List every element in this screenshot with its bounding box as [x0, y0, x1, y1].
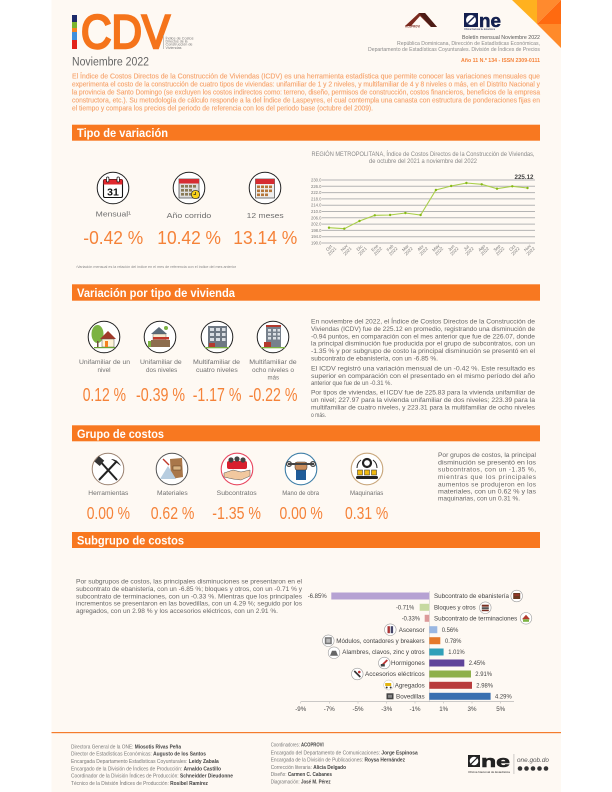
y axis labels: 190.0: [311, 240, 322, 246]
text block: análisis general: [311, 317, 536, 419]
label: Herramientas: Herramientas: [88, 490, 128, 497]
footer credits left: Encargado de la División de Índices de Producción: Arnaldo Castillo: [71, 765, 221, 772]
intro text: experimenta el costo de la construcción de cuatro tipos de viviendas: unifamiliar de 1 y 2 niveles, y multifamiliar de 4 y 8 niveles o más, en el Distrito Nacional y: [72, 80, 540, 88]
y axis labels: 194.0: [311, 234, 322, 239]
publication info: República Dominicana, Dirección de Estadísticas Económicas,: [397, 41, 540, 47]
bar category labels: Subcontrato de terminaciones: [434, 616, 517, 622]
icon: eight-level building: [257, 321, 289, 353]
y axis labels: 218.0: [311, 196, 322, 201]
y axis labels: 198.0: [311, 228, 322, 233]
intro text: la provincia de Santo Domingo (se excluyen los costos indirectos como: terreno, diseño, permisos de construcción, costos financieros, beneficios de la empresa: [72, 88, 540, 96]
social icons: [518, 766, 548, 771]
x axis: -3%: [381, 706, 393, 713]
x axis labels: 2022: [434, 246, 445, 256]
x axis labels: May: [431, 243, 441, 253]
bar category labels: Agregados: [395, 682, 425, 690]
text block: subgrupos: subcontrato de terminaciones, con un -0.33 %. Mientras que los principales: [76, 593, 303, 600]
text block: análisis general: Por tipos de viviendas, el ICDV fue de 225.83 para la vivienda unifamiliar de: [311, 390, 535, 397]
x axis labels: Sep: [492, 243, 502, 252]
footer credits right: Encargada de la División de Publicaciones: Roysa Hernández: [271, 758, 405, 764]
x axis labels: Ago: [477, 243, 487, 252]
last value: 225.12: [514, 174, 534, 181]
icon: two-level house: [144, 321, 176, 353]
text block: análisis general: anterior que fue de un -0.31 %.: [311, 380, 392, 387]
label: Materiales: Materiales: [157, 490, 188, 497]
logo: ONE: [464, 11, 501, 31]
value: unifamiliar dos niveles: -0.39 %: [136, 384, 185, 405]
bar values: 0.56%: [442, 627, 459, 634]
text block: grupos de costos: mientras que los principales: [438, 474, 537, 481]
x axis labels: 2022: [480, 246, 491, 256]
x axis labels: Oct: [508, 243, 517, 252]
icon: labour: [285, 453, 317, 485]
text block: análisis general: multifamiliar de cuatro niveles, y 223.31 para la multifamiliar de ocho niveles: [311, 405, 536, 412]
y axis labels: 206.0: [311, 215, 322, 220]
label: unifamiliar dos niveles: Unifamiliar de: [140, 359, 182, 366]
section heading: Subgrupo de costos: Subgrupo de costos: [77, 534, 184, 548]
bar values: -0.33%: [402, 616, 420, 622]
publication info: Departamento de Estadísticas Coyunturales. División de Índices de Precios: [368, 46, 540, 53]
panel: tipos de vivienda: [79, 321, 297, 405]
label: Mensual: Mensual¹: [96, 210, 132, 218]
value: multifamiliar ocho niveles: -0.22 %: [249, 384, 297, 405]
icon: year calendar with clock: [173, 172, 205, 204]
bar category icons: [322, 590, 532, 699]
text block: grupos de costos: disminución se presentó en los: [438, 459, 537, 466]
label: 12 meses: 12 meses: [247, 211, 284, 220]
bar values: -6.85%: [308, 593, 327, 600]
text block: grupos de costos: subcontratos, con un -1.35 %,: [438, 467, 536, 474]
x axis labels: 2022: [403, 246, 414, 256]
text block: análisis general: un nivel; 227.97 para la vivienda unifamiliar de dos niveles; 223.39 para la: [311, 397, 535, 404]
y axis labels: [311, 178, 322, 246]
logo: ONE: Oficina Nacional de Estadística: [464, 28, 496, 31]
intro text: [72, 71, 540, 112]
date heading: Noviembre 2022: [72, 56, 149, 68]
label: multifamiliar ocho niveles: [249, 359, 297, 382]
panel: tipo de variación: [76, 172, 297, 269]
x axis labels: 2022: [464, 246, 475, 256]
text block: subgrupos: agregados, con un 2.98 % y los accesorios eléctricos, con un 2.91 %.: [76, 608, 278, 615]
footer credits left: Directora General de la ONE: Miosotis Rivas Peña: [71, 744, 181, 750]
text block: grupos de costos: aumentos se produjeron en los: [438, 481, 537, 488]
panel: grupo de costos: [87, 453, 388, 523]
x axis labels: 2022: [373, 246, 384, 256]
text block: grupos de costos: Por grupos de costos, la principal: [438, 452, 537, 459]
section heading: Grupo de costos: [72, 425, 540, 441]
bar values: 4.29%: [495, 694, 512, 700]
label: unifamiliar un nivel: Unifamiliar de un: [79, 359, 131, 366]
x axis: 5%: [496, 706, 506, 713]
section heading: Grupo de costos: Grupo de costos: [77, 427, 164, 441]
label: multifamiliar ocho niveles: ocho niveles o: [252, 367, 295, 374]
bar values: 2.98%: [476, 682, 493, 690]
chart: índice línea: [311, 151, 536, 256]
text block: análisis general: subcontrato de ebanistería, con un -6.85 %.: [311, 355, 438, 362]
corner decoration: [512, 0, 561, 48]
text block: subgrupos: Por subgrupos de costos, las principales disminuciones se presentaron en el: [76, 579, 303, 586]
bar category labels: Subcontrato de ebanistería: [434, 593, 509, 600]
label: multifamiliar cuatro niveles: [193, 359, 241, 374]
section heading: Tipo de variación: Tipo de variación: [77, 126, 168, 140]
bar values: 0.78%: [445, 638, 462, 645]
bar category labels: Ascensor: [399, 627, 425, 634]
x axis labels: Feb: [386, 243, 395, 252]
text block: análisis general: -0.94 puntos, en comparación con el mes anterior que fue de 226.07, donde: [311, 333, 535, 340]
value: multifamiliar cuatro niveles: -1.17 %: [193, 384, 241, 405]
logo: ACOPROVI: ACOPROVI: [405, 24, 420, 28]
text block: análisis general: la principal disminución fue producida por el grupo de subcontratos, con un: [311, 341, 535, 348]
footnote: ¹Variación mensual es la relación del índice en el mes de referencia con el índice del mes anterior: [76, 265, 237, 269]
icon: monthly calendar: [97, 172, 129, 204]
icon: tools: [92, 453, 124, 485]
text block: análisis general: o más.: [311, 412, 326, 419]
logo: ONE: ne: [479, 11, 501, 31]
text block: subgrupos: subcontrato de ebanistería, con un -6.85 %; bloques y otros, con un -0.71 % y: [76, 586, 303, 593]
bar values: [308, 593, 512, 700]
bar category labels: [336, 593, 517, 700]
publication info: Año 11 N.º 134 - ISSN 2309-0111: [461, 58, 540, 64]
text block: análisis general: superior en comparación con el presentado en el mismo período del año: [311, 373, 535, 380]
label: Maquinarias: Maquinarias: [350, 490, 383, 497]
footer credits left: Director de Estadísticas Económicas: Augusto de los Santos: [71, 752, 206, 758]
label: unifamiliar dos niveles: [140, 359, 182, 374]
logo: ICDV: Índice de Costos: [166, 36, 194, 40]
label: multifamiliar cuatro niveles: Multifamiliar de: [193, 359, 241, 366]
x axis: -7%: [324, 706, 335, 713]
footer logo: ONE: [468, 752, 549, 774]
intro text: constructora, etc.). Su metodología de cálculo responde a la del Índice de Laspeyres, el cual contempla una canasta con estructura de ponderaciones fijas en: [72, 95, 540, 104]
footer credits right: [271, 743, 418, 785]
section heading: Subgrupo de costos: [72, 532, 540, 548]
value: Maquinarias: 0.31 %: [345, 503, 388, 523]
icon: one-level house: [88, 321, 120, 353]
text block: análisis general: Viviendas (ICDV) fue de 225.12 en promedio, registrando una disminución de: [311, 326, 535, 333]
x axis labels: Jun: [447, 243, 456, 252]
footer credits right: Corrección literaria: Alicia Delgado: [271, 765, 346, 771]
footer credits left: Encargada Departamento Estadísticas Coyunturales: Leidy Zabala: [71, 759, 219, 765]
x axis: -9%: [295, 706, 307, 713]
label: unifamiliar un nivel: nivel: [98, 367, 110, 374]
bar values: 2.91%: [475, 671, 492, 678]
footer logo: ONE: Oficina Nacional de Estadística: [468, 770, 511, 774]
publication info: [368, 35, 540, 64]
x axis labels: Nov: [340, 243, 349, 252]
text block: grupos de costos: [438, 452, 537, 503]
x axis labels: 2021: [327, 246, 338, 256]
bar values: 2.45%: [469, 660, 486, 667]
x axis labels: 2022: [388, 246, 399, 256]
x axis: -1%: [409, 706, 421, 713]
y axis labels: 210.0: [311, 209, 322, 214]
x axis labels: Ene: [370, 243, 380, 252]
bar category labels: Hormigones: [391, 660, 425, 667]
x axis labels: [324, 242, 536, 256]
bar values: -0.71%: [396, 604, 415, 612]
x axis labels: 2021: [342, 246, 353, 256]
value: 12 meses: 13.14 %: [233, 227, 297, 248]
x axis labels: 2022: [495, 246, 506, 256]
text block: análisis general: -1.35 % y por subgrupo de costo la principal disminución se presentó en el: [311, 348, 536, 355]
section heading: Tipo de variación: [72, 125, 540, 141]
text block: subgrupos: [76, 579, 303, 615]
label: multifamiliar ocho niveles: más: [268, 374, 279, 382]
value: Herramientas: 0.00 %: [87, 503, 130, 523]
y axis labels: 226.0: [311, 184, 322, 189]
x axis labels: Abr: [416, 243, 425, 252]
logo: ICDV: CDV: [81, 5, 171, 58]
line series: [328, 182, 529, 230]
y axis labels: 214.0: [311, 203, 322, 208]
bar category labels: Módulos, contadores y breakers: [336, 638, 425, 645]
footer credits left: Técnico de la División Índices de Producción: Rosibel Ramírez: [71, 780, 208, 787]
value: unifamiliar un nivel: 0.12 %: [83, 384, 126, 405]
x axis labels: Oct: [325, 243, 334, 252]
bar category labels: Bloques y otros: [434, 604, 476, 612]
x axis: [295, 702, 514, 713]
label: Mano de obra: Mano de obra: [282, 490, 319, 497]
y axis labels: 230.0: [311, 178, 322, 182]
x axis: 1%: [439, 706, 449, 713]
value: Materiales: 0.62 %: [151, 503, 194, 523]
icon: subcontracts: [221, 453, 253, 485]
footer credits right: Diagramación: José M. Pérez: [271, 779, 331, 785]
footer credits right: Coordinadores: ACOPROVI: [271, 743, 324, 749]
x axis labels: Mar: [401, 243, 410, 252]
chart title: [312, 151, 535, 165]
intro text: El Índice de Costos Directos de la Construcción de Viviendas (ICDV) es una herramienta estadística que permite conocer las variaciones mensuales que: [72, 71, 540, 80]
x axis labels: Nov: [523, 243, 533, 252]
publication info: Boletín mensual Noviembre 2022: [462, 35, 540, 41]
value: año corrido: 10.42 %: [157, 227, 221, 248]
logo: ICDV: Construcción de: [166, 43, 193, 47]
logo: ACOPROVI: [405, 13, 437, 28]
x axis: 3%: [468, 706, 477, 713]
bar category labels: Bovedillas: [396, 694, 425, 700]
footer credits right: Encargado del Departamento de Comunicaciones: Jorge Espinosa: [271, 750, 418, 756]
x axis labels: Dic: [355, 243, 364, 252]
x axis labels: 2021: [357, 246, 368, 256]
bars: [331, 592, 491, 700]
bar values: 1.01%: [448, 649, 465, 656]
text block: grupos de costos: materiales, con un 0.62 % y las: [438, 488, 537, 495]
text block: análisis general: En noviembre del 2022, el Índice de Costos Directos de la Construcción de: [311, 317, 535, 326]
label: unifamiliar un nivel: [79, 359, 131, 374]
value: Subcontratos: -1.35 %: [212, 503, 261, 523]
logo: ICDV: Directos de la: [166, 40, 188, 44]
x axis: -5%: [352, 706, 364, 713]
label: Subcontratos: Subcontratos: [217, 490, 257, 497]
footer credits left: [71, 744, 233, 787]
chart title: de octubre del 2021 a noviembre del 2022: [369, 159, 478, 165]
icon: monthly calendar: 31: [107, 187, 119, 199]
chart title: REGIÓN METROPOLITANA, Índice de Costos Directos de la Construcción de Viviendas,: [312, 151, 535, 158]
label: unifamiliar dos niveles: dos niveles: [146, 367, 177, 374]
bar category labels: Accesorios eléctricos: [365, 671, 425, 678]
icon: materials: [156, 453, 188, 485]
label: Año corrido: Año corrido: [167, 211, 211, 220]
intro text: el tiempo y compara los precios del periodo de referencia con los del periodo base (octubre del 2009).: [72, 104, 373, 112]
label: multifamiliar cuatro niveles: cuatro niveles: [196, 367, 238, 374]
footer credits left: Coordinador de la División Índices de Producción: Schneidder Dieudonne: [71, 773, 233, 780]
section heading: Variación por tipo de vivienda: [72, 284, 540, 301]
text block: subgrupos: incrementos se presentaron en las bovedillas, con un 4.29 %; seguido por los: [76, 601, 303, 608]
text block: análisis general: El ICDV registró una variación mensual de un -0.42 %. Este resultado es: [311, 366, 536, 373]
text block: grupos de costos: maquinarias, con un 0.31 %.: [438, 496, 520, 503]
label: multifamiliar ocho niveles: Multifamiliar de: [249, 359, 297, 366]
y axis labels: 222.0: [311, 190, 322, 195]
footer credits right: Diseño: Carmen C. Cabanes: [271, 772, 332, 778]
icon: machinery: [351, 453, 383, 485]
icon: four-level building: [201, 321, 233, 353]
x axis labels: Jul: [463, 244, 470, 252]
logo: ICDV: Viviendas: [166, 46, 182, 50]
value: mensual: -0.42 %: [83, 227, 143, 248]
footer logo: ONE: ne: [481, 752, 510, 771]
x axis labels: 2022: [449, 246, 460, 256]
icon: twelve month calendar: [249, 172, 281, 204]
website: one.gob.do: [517, 757, 549, 764]
bar chart: subgrupos: [295, 590, 532, 713]
x axis labels: 2022: [419, 246, 429, 256]
bar category labels: Alambres, clavos, zinc y otros: [342, 649, 425, 656]
y axis labels: 202.0: [311, 222, 322, 227]
value: Mano de obra: 0.00 %: [280, 503, 323, 523]
x axis labels: 2022: [510, 246, 521, 256]
section heading: Variación por tipo de vivienda: Variación por tipo de vivienda: [77, 286, 235, 300]
x axis labels: 2022: [525, 246, 536, 256]
